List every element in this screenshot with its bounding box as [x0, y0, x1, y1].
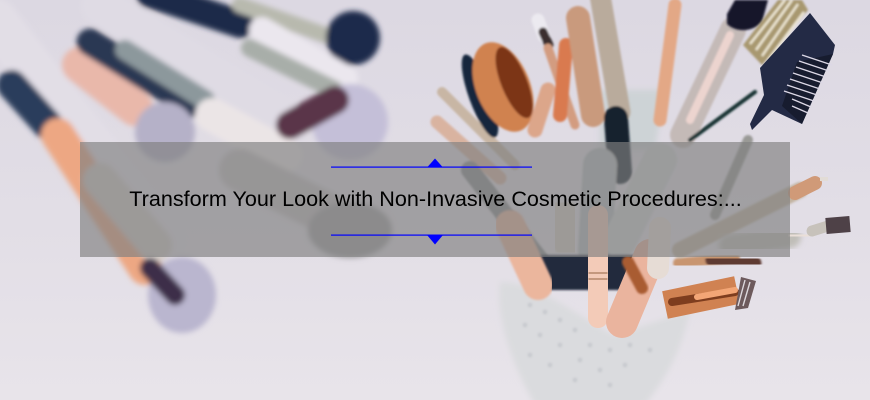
icon: flat brush tip: [735, 277, 756, 310]
heading: Transform Your Look with Non-Invasive Cosmetic Procedures:...: [129, 186, 742, 211]
brushes in the cup: [437, 0, 755, 260]
icon: dark brush head: [727, 0, 768, 30]
cup of brushes on the right: [499, 90, 690, 400]
blurred brushes on the left: [0, 0, 392, 333]
upper right slanted brush: [680, 178, 850, 250]
knitted cup texture: [523, 303, 652, 387]
panel-covered bristles: [560, 215, 570, 240]
icon: striped bristle brush: [743, 0, 808, 65]
title panel: [80, 142, 790, 257]
bottom ornament: line and triangle: [331, 234, 532, 244]
copper brushes below the panel: [510, 215, 755, 322]
panel background: [80, 142, 790, 257]
icon: navy comb: [750, 13, 835, 130]
top ornament: line and triangle: [331, 158, 532, 168]
